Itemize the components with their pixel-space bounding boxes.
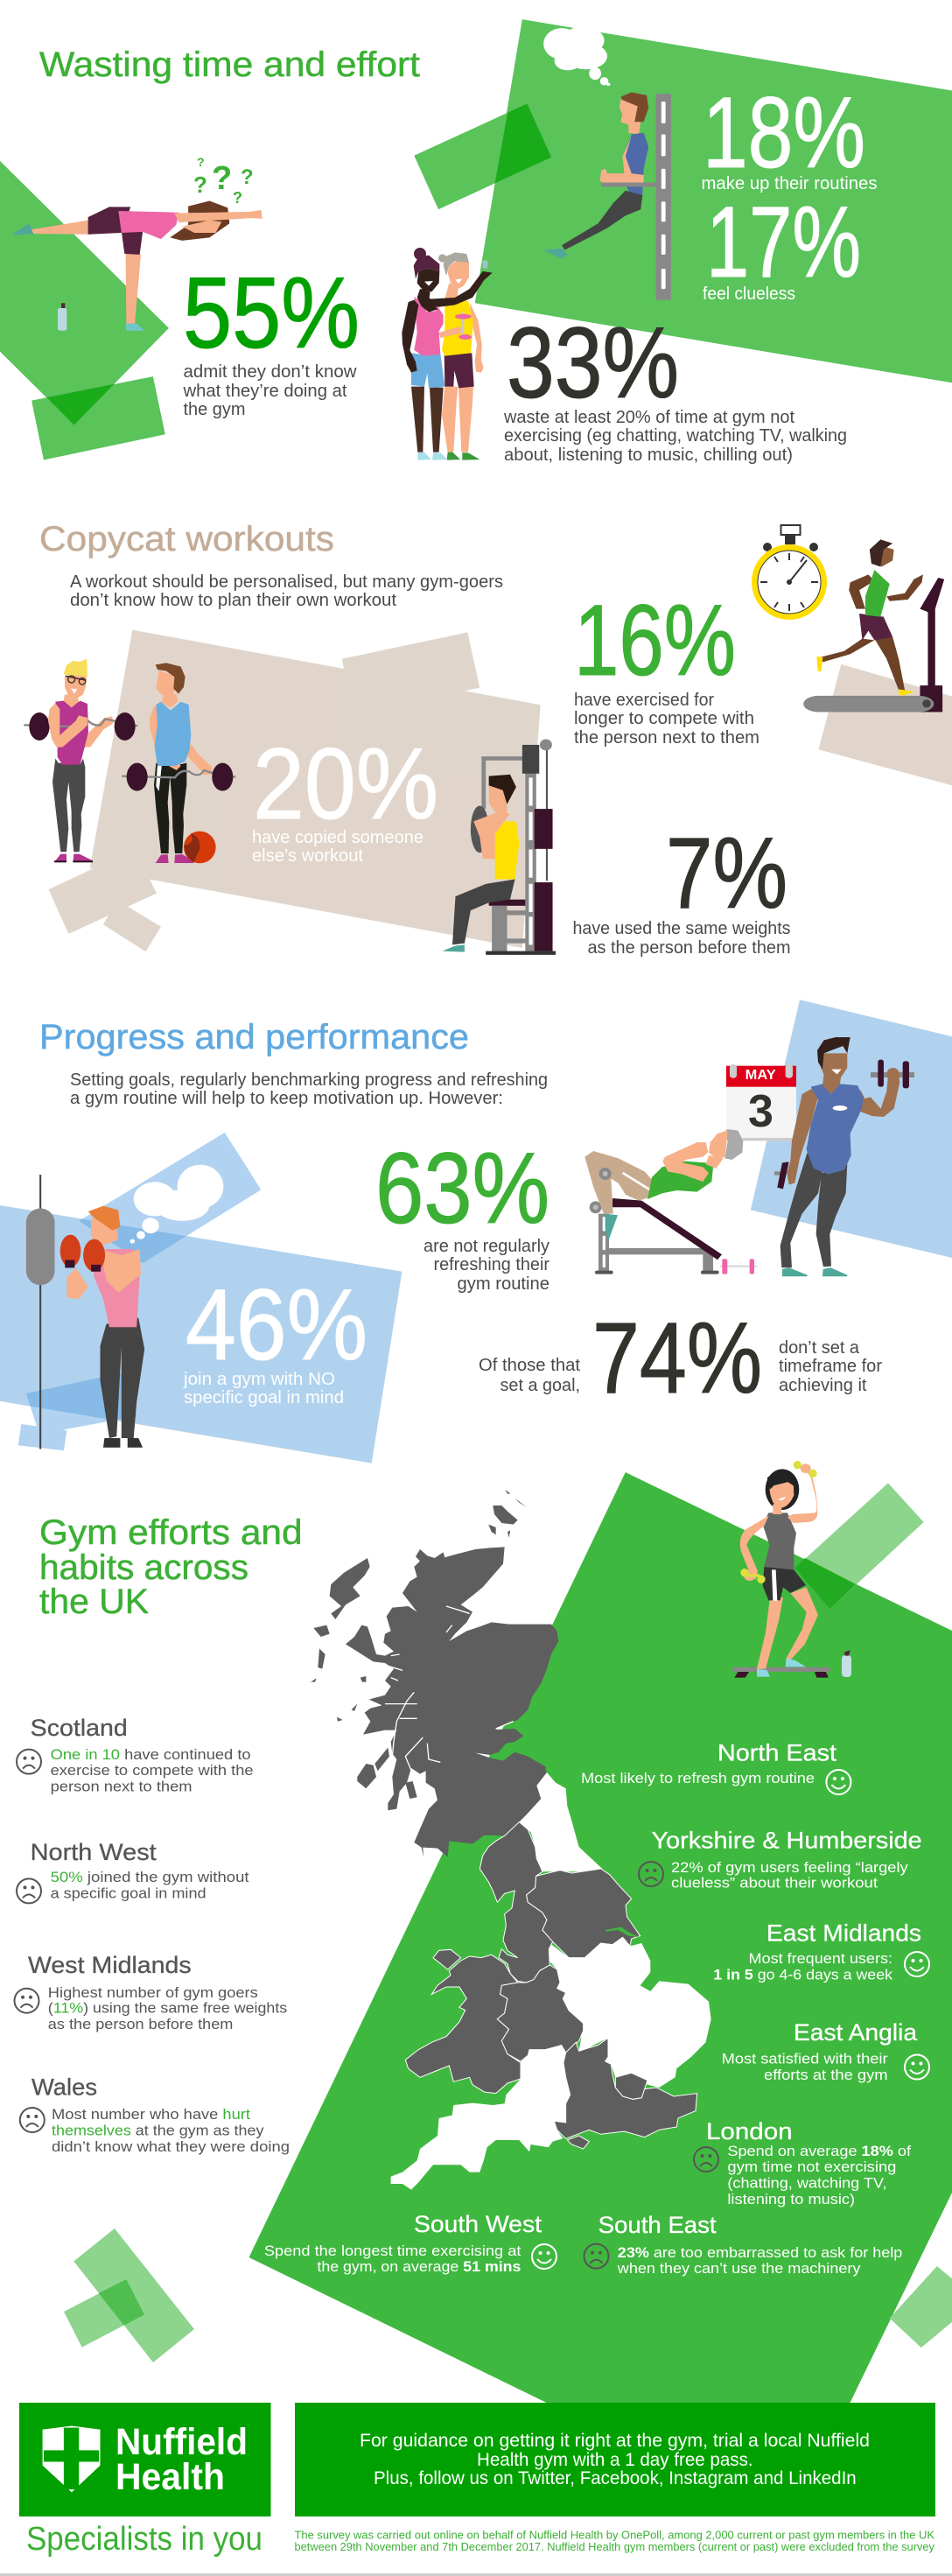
stat: 7%: as the person before them [588, 938, 791, 958]
call to action box: Health gym with a 1 day free pass. [477, 2450, 753, 2470]
icon: confused woman stretching: ? [212, 160, 232, 197]
intro text: A workout should be personalised, but many gym-goers [70, 572, 503, 592]
logo box: Nuffield [116, 2421, 248, 2463]
map: South West [391, 2046, 570, 2190]
region: Yorkshire and Humberside: Yorkshire & Humberside [652, 1827, 922, 1853]
stat: 20%: 20% [253, 728, 438, 840]
region: North East: North East [718, 1739, 837, 1765]
stat: 7%: have used the same weights [572, 919, 791, 938]
icon: man on incline bench [584, 1129, 757, 1274]
panel: wasting time and effort [0, 19, 952, 465]
stat: 7% [572, 818, 791, 958]
stat: 63%: gym routine [457, 1274, 550, 1294]
stat: 46%: 46% [186, 1269, 368, 1381]
stat: 63%: 63% [375, 1133, 550, 1245]
region: Wales: Wales [32, 2074, 97, 2101]
stat: 16%: longer to compete with [574, 709, 754, 728]
icon: two women taking a selfie [402, 248, 493, 460]
icon: boxer and punching bag [26, 1175, 144, 1449]
stat: 74%: timeframe for [779, 1357, 882, 1376]
region: London: listening to music) [727, 2191, 855, 2207]
region: South West: the gym, on average 51 mins [317, 2258, 521, 2275]
heading [39, 1513, 303, 1621]
region: North West: North West [31, 1839, 157, 1865]
region: South West: South West [414, 2211, 542, 2237]
stat: 33%: 33% [507, 307, 679, 419]
heading: Gym efforts and [39, 1513, 303, 1552]
map: South East [554, 2038, 697, 2138]
icon: confused woman stretching: ? [197, 155, 205, 169]
stat: 74%: 74% [592, 1302, 762, 1414]
call to action box: For guidance on getting it right at the gym, trial a local Nuffield [360, 2431, 870, 2451]
stat: 46%: specific goal in mind [184, 1388, 344, 1407]
map: Yorkshire and Humberside [527, 1869, 640, 1958]
icon: confused woman stretching: ? [193, 172, 207, 198]
icon: man doing wall sit [543, 92, 671, 300]
call to action box [295, 2403, 935, 2516]
panel: gym efforts across the UK [14, 1461, 952, 2403]
stat: 16%: have exercised for [574, 691, 714, 710]
stat: 74%: Of those that [479, 1356, 580, 1375]
region: London: gym time not exercising [727, 2158, 896, 2175]
map: Wales [405, 1955, 521, 2094]
stat: 33%: waste at least 20% of time at gym not [503, 408, 794, 427]
icon: blond man with barbell [24, 659, 137, 862]
call to action box: Plus, follow us on Twitter, Facebook, Instagram and LinkedIn [374, 2468, 857, 2488]
stat: 20%: have copied someone [252, 828, 424, 847]
title: Wasting time and effort [39, 46, 420, 84]
region: South East: 23% are too embarrassed to ask for help [618, 2244, 902, 2261]
heading: the UK [39, 1583, 149, 1621]
region: Wales: themselves at the gym as they [52, 2122, 264, 2138]
intro text: don’t know how to plan their own workout [70, 591, 396, 610]
stat: 7%: 7% [666, 818, 788, 930]
region: Scotland: person next to them [51, 1779, 192, 1794]
region: North West: 50% joined the gym without [51, 1869, 249, 1885]
icon: confused woman stretching: ? [233, 189, 242, 207]
region: London: (chatting, watching TV, [727, 2175, 886, 2192]
stat: 33%: exercising (eg chatting, watching TV, walking [504, 426, 847, 446]
icon: confused woman stretching: ? [241, 165, 254, 189]
region: Wales: Most number who have hurt [52, 2106, 250, 2123]
stat: 16%: the person next to them [574, 728, 760, 748]
region: South East [584, 2212, 902, 2277]
stat: 16% [574, 585, 760, 748]
stat: 74%: achieving it [779, 1376, 867, 1395]
map: West Midlands [497, 1965, 584, 2061]
stat: 55%: 55% [183, 257, 360, 369]
stat: 55%: what they’re doing at [182, 382, 347, 401]
region: Scotland: One in 10 have continued to [51, 1746, 251, 1763]
region: West Midlands: West Midlands [28, 1952, 192, 1978]
region: Yorkshire and Humberside [639, 1827, 922, 1892]
region: East Anglia: East Anglia [794, 2019, 918, 2046]
intro text: a gym routine will help to keep motivation up. However: [70, 1089, 503, 1108]
icon: calendar [726, 1064, 796, 1141]
stat: 55% [182, 257, 360, 419]
map: London [615, 2073, 648, 2099]
stat: 63% [375, 1133, 550, 1294]
beige background shapes [49, 630, 952, 951]
stat: 18%: 18% [703, 77, 865, 189]
light green decorative shapes [64, 1483, 952, 2362]
icon: thought cloud [543, 26, 610, 86]
panel: progress and performance [0, 1000, 952, 1463]
heading: Progress and performance [39, 1018, 469, 1056]
region: South West: Spend the longest time exercising at [264, 2243, 522, 2259]
logo box [19, 2403, 271, 2516]
green background shapes [0, 19, 952, 460]
stat: 46%: join a gym with NO [183, 1370, 335, 1389]
region: South East: South East [598, 2212, 717, 2238]
region: West Midlands: Highest number of gym goers [48, 1984, 258, 2001]
region: London [694, 2118, 911, 2207]
region: London: Spend on average 18% of [727, 2143, 911, 2159]
region: West Midlands: (11%) using the same free weights [48, 2000, 287, 2017]
stat: 20%: else’s workout [252, 846, 363, 866]
region: East Midlands: East Midlands [766, 1920, 921, 1947]
region: London: London [706, 2118, 793, 2144]
map: Isle of Wight [567, 2136, 589, 2149]
region: East Anglia: efforts at the gym [764, 2067, 888, 2083]
region: South East: when they can’t use the machinery [617, 2260, 861, 2277]
icon: man on lat pulldown machine [442, 740, 556, 955]
region: East Midlands: 1 in 5 go 4-6 days a week [713, 1967, 893, 1983]
icon: runner on treadmill [803, 539, 944, 712]
icon: woman on step with dumbbells [732, 1461, 851, 1678]
region: Wales: didn’t know what they were doing [52, 2138, 290, 2155]
region: Scotland [17, 1715, 254, 1794]
heading: Copycat workouts [39, 520, 334, 558]
stat: 33%: about, listening to music, chilling out) [504, 446, 793, 465]
intro text: Setting goals, regularly benchmarking progress and refreshing [70, 1070, 548, 1090]
panel: copycat workouts [24, 520, 952, 958]
green background shape [248, 1472, 952, 2403]
map: North West [480, 1822, 553, 1983]
stat: 17%: feel clueless [703, 284, 795, 304]
panel: footer [0, 2403, 952, 2576]
icon: calendar: MAY [746, 1068, 776, 1083]
region: North West: a specific goal in mind [51, 1885, 206, 1902]
region: South West [264, 2211, 556, 2275]
region: East Anglia: Most satisfied with their [722, 2050, 888, 2067]
stat: 55%: the gym [184, 400, 245, 419]
stat: 33% [503, 307, 847, 465]
heading: habits across [39, 1548, 248, 1587]
tagline: Specialists in you [26, 2521, 262, 2558]
stat: 16%: 16% [574, 585, 736, 697]
survey footnote: The survey was carried out online on behalf of Nuffield Health by OnePoll, among 2,000 current or past gym members in the UK [294, 2530, 935, 2542]
intro text [70, 1070, 548, 1108]
icon: thought cloud [130, 1165, 223, 1244]
stat: 74%: don’t set a [779, 1338, 860, 1358]
map: Anglesey [433, 1949, 461, 1969]
icon: trainer lifting dumbbell [774, 1037, 914, 1276]
region: East Anglia [722, 2019, 929, 2083]
stat: 63%: are not regularly [424, 1237, 550, 1256]
intro text [70, 572, 503, 610]
stat: 74% [479, 1302, 882, 1414]
icon: shield [43, 2426, 101, 2492]
map: East Midlands and East Anglia [549, 1937, 711, 2088]
region: North East [581, 1739, 850, 1794]
region: Yorkshire and Humberside: clueless” about their workout [671, 1875, 878, 1892]
region: East Midlands: Most frequent users: [749, 1950, 892, 1967]
icon: confused woman stretching [12, 155, 262, 331]
stat: 55%: admit they don’t know [184, 362, 357, 382]
region: Scotland: Scotland [31, 1715, 128, 1741]
icon: calendar: 3 [748, 1086, 774, 1137]
icon: man with barbell and ball [122, 663, 235, 863]
icon: stopwatch [752, 525, 827, 620]
stat: 74%: set a goal, [500, 1376, 580, 1395]
region: West Midlands: as the person before them [48, 2016, 233, 2032]
map: England and Wales regions [391, 1822, 711, 2190]
region: Wales [20, 2074, 290, 2155]
region: North West [17, 1839, 249, 1903]
region: West Midlands [14, 1952, 287, 2032]
blue background shapes [0, 1000, 952, 1463]
stat: 63%: refreshing their [434, 1255, 550, 1274]
region: East Midlands [713, 1920, 929, 1983]
stat: 17%: 17% [706, 186, 861, 298]
map: North East [519, 1772, 602, 1871]
map: Scotland [311, 1490, 558, 1857]
survey footnote: between 29th November and 7th December 2017. Nuffield Health gym members (current or past) were excluded from the survey [294, 2541, 935, 2553]
region: Scotland: exercise to compete with the [51, 1762, 254, 1779]
region: North East: Most likely to refresh gym routine [581, 1770, 815, 1786]
logo box: Health [116, 2456, 225, 2498]
region: Yorkshire and Humberside: 22% of gym users feeling “largely [671, 1859, 908, 1876]
survey footnote [294, 2530, 935, 2553]
stat: 18%: make up their routines [702, 174, 877, 193]
